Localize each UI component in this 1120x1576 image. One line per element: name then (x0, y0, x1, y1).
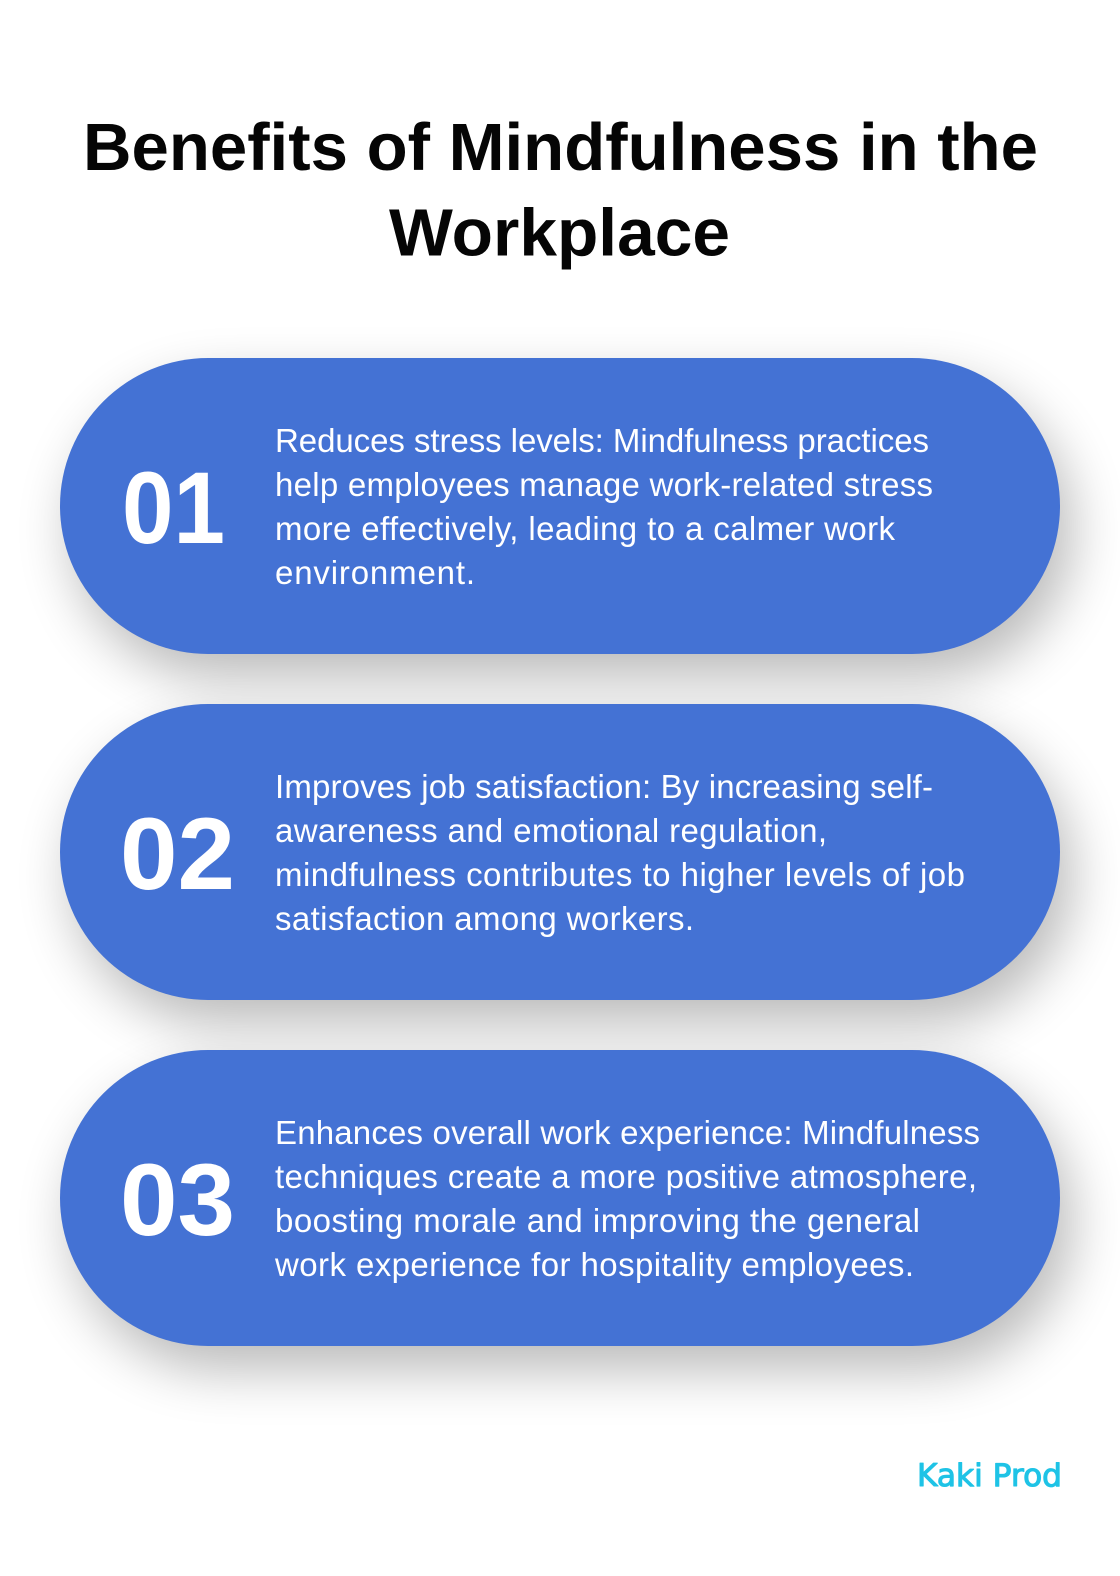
text block 03 (274, 1114, 980, 1283)
text block 02 (275, 768, 965, 937)
title (83, 110, 1038, 270)
panel: benefit 01 (60, 358, 1072, 678)
text block 01: environment. (275, 554, 475, 591)
text block 01: Reduces stress levels: Mindfulness practices (275, 422, 929, 459)
text block 02: satisfaction among workers. (275, 900, 694, 937)
text block 01 (275, 422, 933, 591)
text block 03: Enhances overall work experience: Mindfulness (275, 1114, 980, 1151)
number 03: 03 (120, 1143, 235, 1257)
text block 03: boosting morale and improving the general (275, 1202, 920, 1239)
text block 03: work experience for hospitality employees. (274, 1246, 914, 1283)
panel: benefit 03 (60, 1050, 1072, 1370)
logo: Kaki Prod: Kaki Prod (917, 1458, 1062, 1494)
text block 01: help employees manage work-related stress (275, 466, 933, 503)
number 01: 01 (122, 451, 225, 565)
panel: benefit 02 (60, 704, 1072, 1024)
title: Workplace (389, 196, 730, 270)
text block 02: Improves job satisfaction: By increasing self- (275, 768, 933, 805)
text block 01: more effectively, leading to a calmer work (275, 510, 896, 547)
text block 02: awareness and emotional regulation, (275, 812, 827, 849)
text block 02: mindfulness contributes to higher levels of job (275, 856, 965, 893)
title: Benefits of Mindfulness in the (83, 110, 1038, 185)
text block 03: techniques create a more positive atmosphere, (275, 1158, 977, 1195)
number 02: 02 (120, 797, 235, 911)
